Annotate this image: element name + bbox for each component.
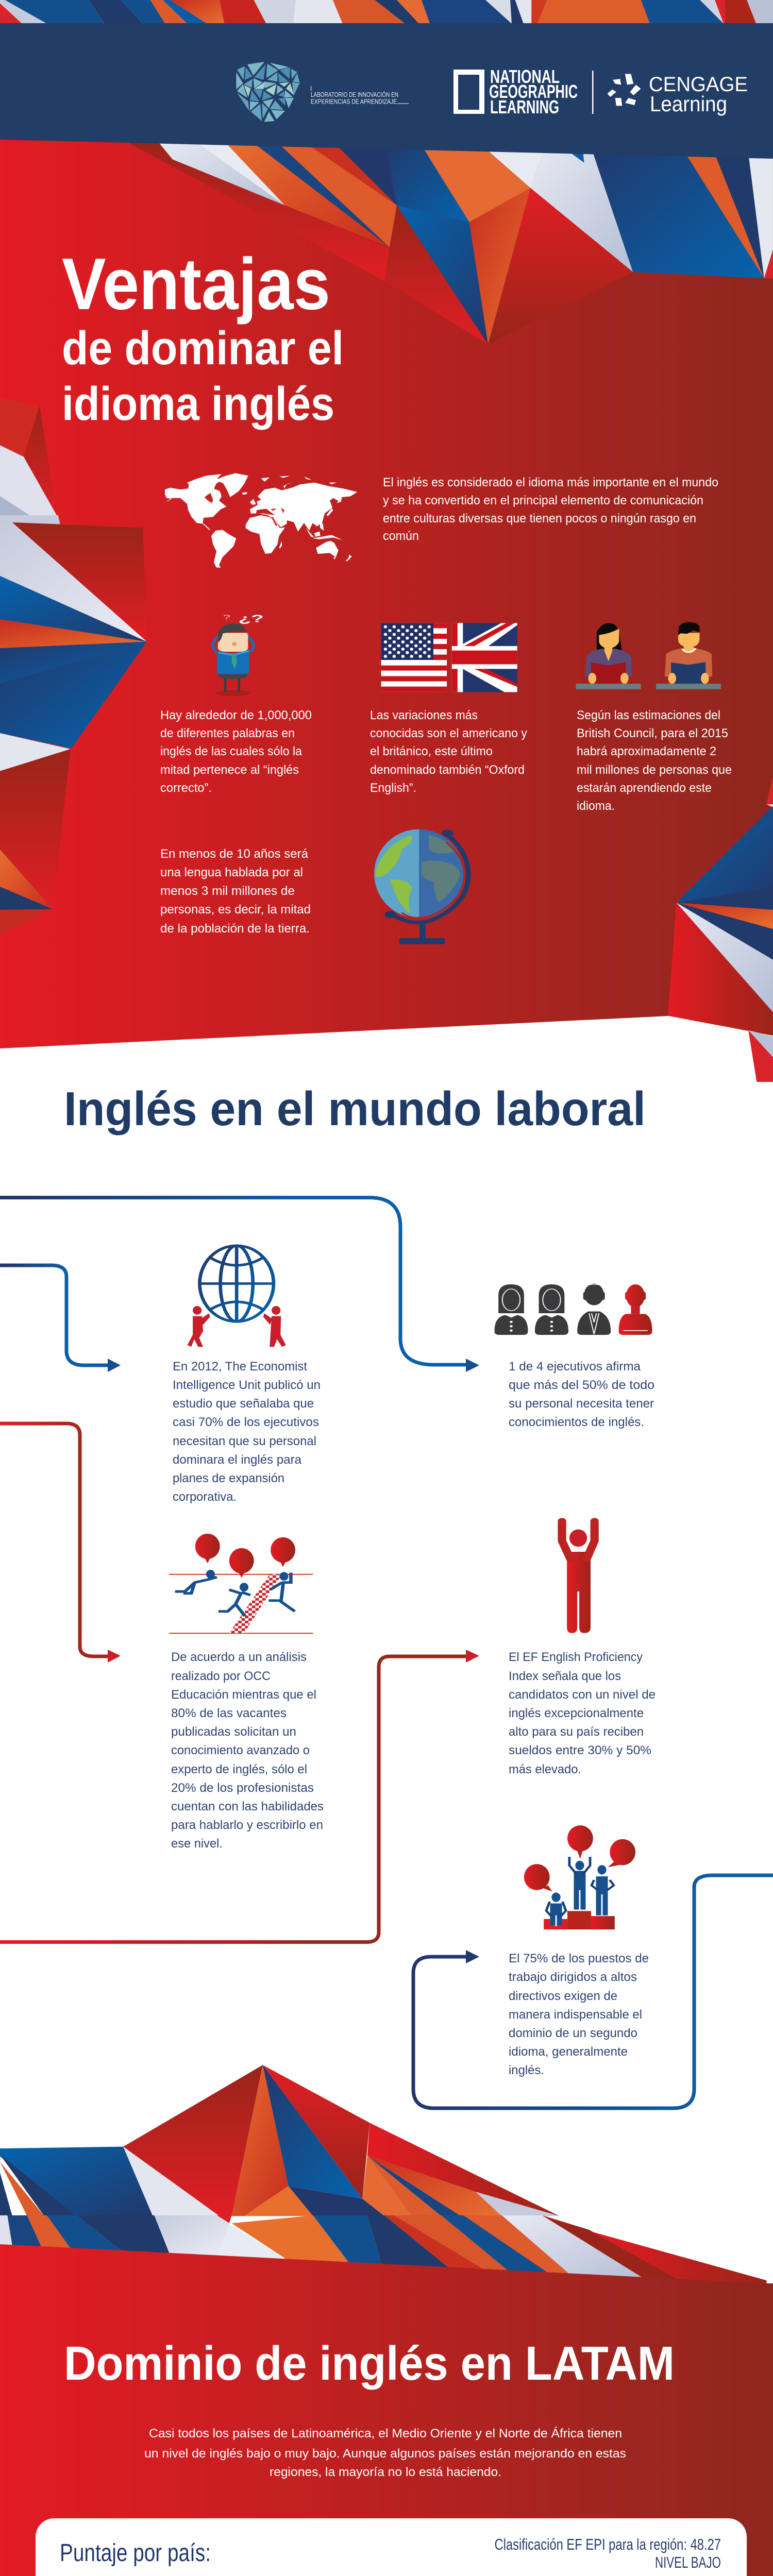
text: one of four executives [509,1360,654,1429]
icon: executive highlighted in red [619,1284,652,1335]
title: ventajas de dominar el idioma inglés [62,243,344,430]
text: occ educación: conocimiento avanzado o [171,1743,310,1757]
text: occ educación: cuentan con las habilidades [171,1800,324,1814]
icon: people holding globe [188,1246,286,1347]
text: one of four executives: 1 de 4 ejecutivos afirma [509,1360,641,1374]
text: one million words: inglés de las cuales sólo la [160,744,303,758]
text: occ educación: Educación mientras que el [171,1688,316,1702]
text: occ educación: De acuerdo a un análisis [171,1650,307,1664]
text: variations [370,708,527,795]
text: occ educación: 80% de las vacantes [171,1706,287,1720]
text: intro: y se ha convertido en el principal elemento de comunicación [383,494,703,507]
text: british council: mil millones de personas que [577,763,732,777]
text: ef english proficiency index: sueldos entre 30% y 50% [509,1743,651,1757]
text: the economist: estudio que señalaba que [173,1397,314,1411]
icon: woman reading [576,623,641,689]
icon: confused man [213,613,264,696]
shards: mountain above LATAM section [0,2065,767,2284]
text: seventy five percent: manera indispensable el [509,2008,642,2022]
text: one of four executives: que más del 50% de todo [509,1378,654,1392]
text: variations: conocidas son el americano y [370,726,527,740]
arrow: second blue connector [0,1265,121,1372]
icon: podium with speakers [524,1825,635,1929]
text: variations: el británico, este último [370,744,493,758]
text: the economist: casi 70% de los ejecutivos [173,1415,319,1429]
text: occ educación: para hablarlo y escribirlo en [171,1818,323,1832]
icon: people reading [576,622,721,689]
arrow: bottom blue loop connector [413,1875,773,2108]
heading: inglés en el mundo laboral: Inglés en el mundo laboral [64,1082,646,1136]
logo: cengage learning [608,73,748,116]
text: variations: English”. [370,781,416,795]
icon: confused man: ? [223,614,230,621]
text: the economist: corporativa. [173,1490,237,1504]
text: ef english proficiency index: inglés excepcionalmente [509,1706,644,1720]
icon: man reading [656,622,721,689]
text: seventy five percent: inglés. [509,2063,544,2077]
logo: national geographic learning: GEOGRAPHIC [489,81,578,102]
text: one of four executives: su personal necesita tener [509,1397,654,1411]
text: ef english proficiency index: El EF English Proficiency [509,1650,643,1664]
text: seventy five percent: directivos exigen de [509,1989,617,2003]
text: seventy five percent: idioma, generalmente [509,2045,628,2059]
text: the economist [173,1360,321,1504]
icon: confused man: ¿? [238,613,264,624]
icon: US flag [381,623,447,692]
title: ventajas de dominar el idioma inglés: de dominar el [62,322,344,375]
shards below the header [0,141,773,515]
text: occ educación: realizado por OCC [171,1669,271,1683]
icon: executive woman 2 [535,1284,568,1335]
arrow: left red connector [0,1423,121,1663]
text: occ educación: experto de inglés, sólo el [171,1762,307,1776]
panel: red LATAM section background [0,2244,773,2576]
text: one million words: mitad pertenece al “inglés [160,763,299,777]
text: LATAM introduction: regiones, la mayoría no lo está haciendo. [270,2465,501,2479]
text: LATAM introduction: un nivel de inglés bajo o muy bajo. Aunque algunos países están mejorando en estas [144,2447,626,2461]
regional classification: NIVEL BAJO [655,2553,721,2571]
text: one million words: correcto”. [160,781,212,795]
text: the economist: necesitan que su personal [173,1434,316,1448]
text: one of four executives: conocimientos de inglés. [509,1415,644,1429]
text: seventy five percent: dominio de un segundo [509,2026,637,2040]
icon: US and UK flags [381,623,517,692]
text: ten years: menos 3 mil millones de [160,884,295,898]
text: ten years [160,847,311,936]
logo: cengage learning: CENGAGE [649,73,748,96]
text: ef english proficiency index [509,1650,656,1776]
text: british council: British Council, para el 2015 [577,726,728,740]
icon: executive man [577,1283,611,1335]
text: occ educación: publicadas solicitan un [171,1725,296,1739]
text: ten years: En menos de 10 años será [160,847,309,861]
text: british council [577,708,732,813]
panel: red hero section background [0,137,773,1048]
text: the economist: planes de expansión [173,1471,284,1485]
regional classification [495,2535,721,2571]
logo text: laboratorio [311,86,409,105]
text: intro: El inglés es considerado el idioma más importante en el mundo [383,476,718,489]
text: ef english proficiency index: candidatos con un nivel de [509,1688,656,1702]
text: the economist: En 2012, The Economist [173,1360,307,1374]
logo text: laboratorio: LABORATORIO DE INNOVACIÓN EN [311,91,398,98]
text: british council: Según las estimaciones del [577,708,720,722]
text: ten years: personas, es decir, la mitad [160,903,311,917]
icon: executive woman 1 [494,1284,528,1335]
title: ventajas de dominar el idioma inglés: idioma inglés [62,378,334,430]
text: intro [383,476,718,543]
icon: desk globe [374,829,468,944]
text: occ educación [171,1650,324,1851]
header band [0,23,773,159]
text: LATAM introduction: Casi todos los países de Latinoamérica, el Medio Oriente y el Norte de África tienen [149,2427,622,2441]
text: occ educación: 20% de los profesionistas [171,1781,314,1795]
text: ef english proficiency index: más elevado. [509,1762,581,1776]
icon: four executives [494,1283,652,1335]
side shards left and right [0,515,773,1082]
logo: national geographic learning: NATIONAL [490,66,560,87]
text: british council: habrá aproximadamente 2 [577,744,716,758]
logo: laboratorio de innovación shield [236,62,300,122]
text: one million words: Hay alrededor de 1,000,000 [160,708,312,722]
divider [592,71,594,114]
text: british council: estarán aprendiendo este [577,781,712,795]
text: occ educación: ese nivel. [171,1837,223,1851]
icon: person with raised arms [562,1521,595,1633]
text: intro: común [383,529,419,543]
top strip of polygonal shards [0,0,773,24]
text: intro: entre culturas diversas que tienen pocos o ningún rasgo en [383,512,696,526]
text: the economist: dominara el inglés para [173,1453,302,1467]
chart title: Puntaje por país: [60,2539,211,2567]
text: ef english proficiency index: Index señala que los [509,1669,621,1683]
logo: national geographic learning: LEARNING [490,96,559,117]
text: ef english proficiency index: alto para su país reciben [509,1725,644,1739]
title: ventajas de dominar el idioma inglés: Ventajas [62,243,330,325]
text: seventy five percent: trabajo dirigidos a altos [509,1970,637,1984]
arrow: middle red connector [0,1650,479,1942]
text: ten years: una lengua hablada por al [160,866,303,879]
logo: cengage learning: Learning [650,92,727,116]
text: the economist: Intelligence Unit publicó un [173,1378,321,1392]
icon: world map [165,473,357,568]
text: variations: Las variaciones más [370,708,478,722]
icon: runners race [169,1534,313,1633]
text: one million words [160,708,312,795]
arrow: top blue connector [0,1197,479,1372]
logo: national geographic learning [453,66,578,117]
text: british council: idioma. [577,799,615,813]
text: one million words: de diferentes palabras en [160,726,295,740]
text: seventy five percent: El 75% de los puestos de [509,1952,649,1965]
text: LATAM introduction [144,2427,626,2479]
icon: UK flag [452,623,517,692]
text: variations: denominado también “Oxford [370,763,525,777]
logo text: laboratorio: EXPERIENCIAS DE APRENDIZAJE [311,98,397,105]
text: ten years: de la población de la tierra. [160,922,310,936]
panel: score by country chart card [36,2518,747,2576]
heading: dominio de inglés en LATAM: Dominio de inglés en LATAM [64,2336,675,2390]
text: seventy five percent [509,1952,649,2077]
